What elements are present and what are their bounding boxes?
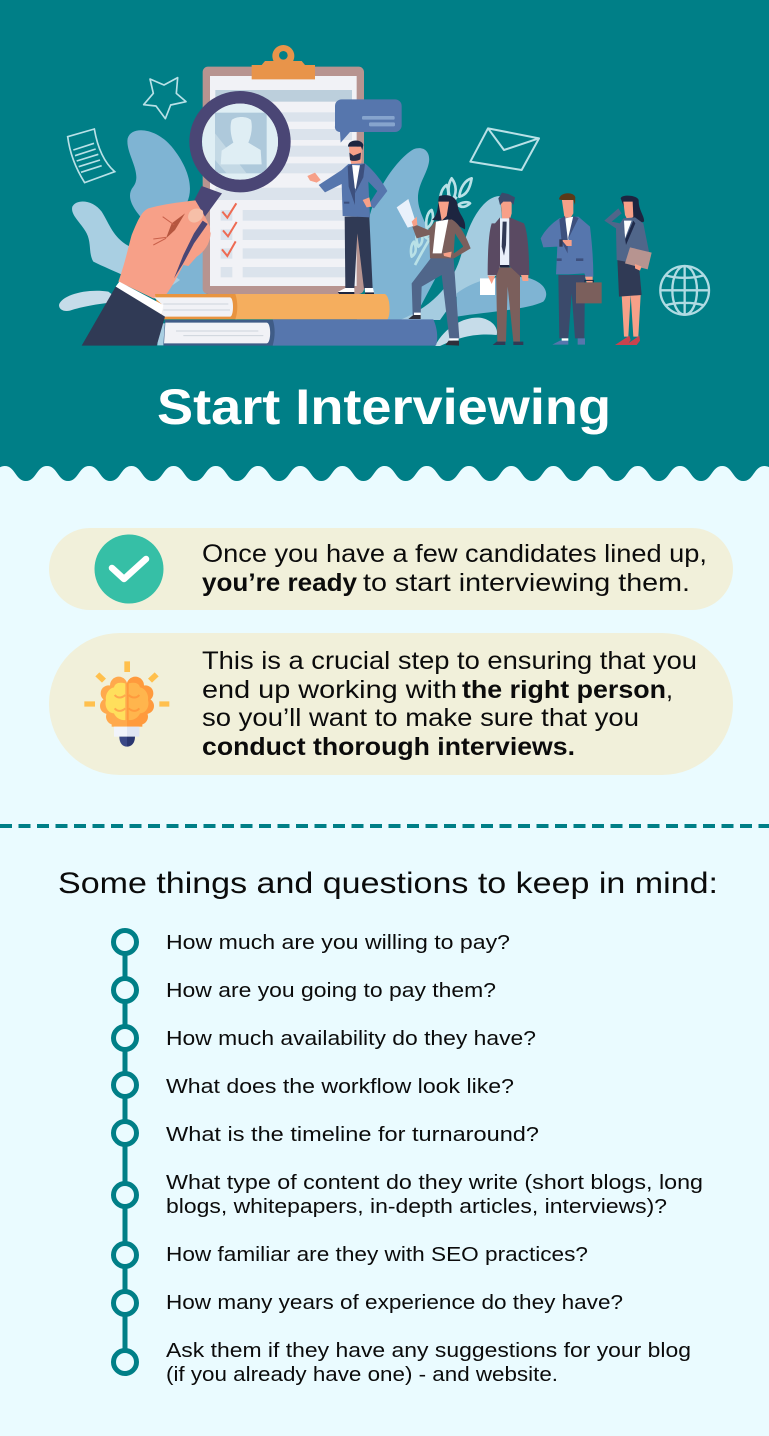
person: man with tie <box>480 193 529 345</box>
callout text <box>202 540 707 597</box>
person: woman on phone with folder <box>604 196 652 345</box>
red check marks <box>222 203 237 256</box>
plant: bottom blob <box>435 318 497 346</box>
question list text: How familiar are they with SEO practices? <box>166 1244 588 1266</box>
callout text: so you’ll want to make sure that you <box>202 704 639 732</box>
question list text <box>166 932 703 1386</box>
clipboard clip <box>252 45 315 79</box>
timeline spine and nodes <box>114 930 136 1374</box>
speech bubble <box>335 99 402 143</box>
fingers <box>183 224 211 266</box>
thumb <box>188 209 203 223</box>
plant: lower left leaf <box>72 201 180 294</box>
person: speaking man with beard <box>307 141 387 294</box>
panel: ready callout <box>49 528 733 610</box>
plant: second leaf <box>400 196 503 320</box>
clipboard, magnifier, hand and books <box>82 45 437 346</box>
icon: brain light bulb <box>84 661 169 747</box>
blue book <box>157 319 437 346</box>
person: man checking watch with briefcase <box>541 193 602 345</box>
hand <box>118 200 210 298</box>
icon: star outline <box>144 78 186 119</box>
icon: check circle <box>94 534 164 604</box>
question list text: What is the timeline for turnaround? <box>166 1124 539 1146</box>
callout text: conduct thorough interviews. <box>202 733 575 761</box>
timeline of questions <box>114 930 703 1386</box>
question list text: What type of content do they write (short blogs, long <box>166 1172 703 1194</box>
callout text: end up working with <box>202 676 457 704</box>
question list text: blogs, whitepapers, in-depth articles, interviews)? <box>166 1196 667 1218</box>
callout text: you’re ready <box>202 569 357 597</box>
clipboard paper <box>210 76 357 286</box>
callout text: the right person <box>462 676 666 704</box>
plant: bottom blob <box>59 291 122 311</box>
panel: crucial step callout <box>49 633 733 775</box>
question list text: Ask them if they have any suggestions for your blog <box>166 1340 691 1362</box>
callout text <box>202 647 697 761</box>
plant: large right leaf <box>357 148 443 320</box>
question list text: How much availability do they have? <box>166 1028 536 1050</box>
title: Start Interviewing <box>157 379 611 435</box>
plant: right blob <box>457 276 546 317</box>
magnifier lens <box>196 97 284 186</box>
callout text: to start interviewing them. <box>363 569 690 597</box>
callout text: This is a crucial step to ensuring that you <box>202 647 697 675</box>
speech bubble and people <box>307 99 652 346</box>
icon: document outline <box>68 129 115 183</box>
handle strip across fingers <box>174 221 208 278</box>
orange book <box>154 294 390 319</box>
suit sleeve <box>82 287 165 346</box>
section heading: Some things and questions to keep in mind: <box>58 867 718 900</box>
question list text: How are you going to pay them? <box>166 980 496 1002</box>
palm creases <box>153 213 185 245</box>
plant: fern outline <box>411 178 472 265</box>
clipboard board <box>203 67 364 294</box>
question list text: What does the workflow look like? <box>166 1076 514 1098</box>
magnifier handle top <box>192 186 222 217</box>
right background plants and doodles <box>357 128 709 346</box>
callout text: Once you have a few candidates lined up, <box>202 540 707 568</box>
clipboard text lines <box>215 90 352 277</box>
question list text: (if you already have one) - and website. <box>166 1364 558 1386</box>
plant: large leaf <box>127 130 207 294</box>
person: woman with paper <box>397 195 471 346</box>
icon: envelope outline <box>470 128 539 170</box>
shirt cuff <box>116 282 163 317</box>
header banner with wavy edge <box>0 0 769 481</box>
question list text: How much are you willing to pay? <box>166 932 510 954</box>
callout text: , <box>666 676 673 704</box>
icon: globe <box>660 266 709 315</box>
hero illustration <box>59 45 709 346</box>
question list text: How many years of experience do they have? <box>166 1292 623 1314</box>
left background plants and doodles <box>59 78 207 311</box>
